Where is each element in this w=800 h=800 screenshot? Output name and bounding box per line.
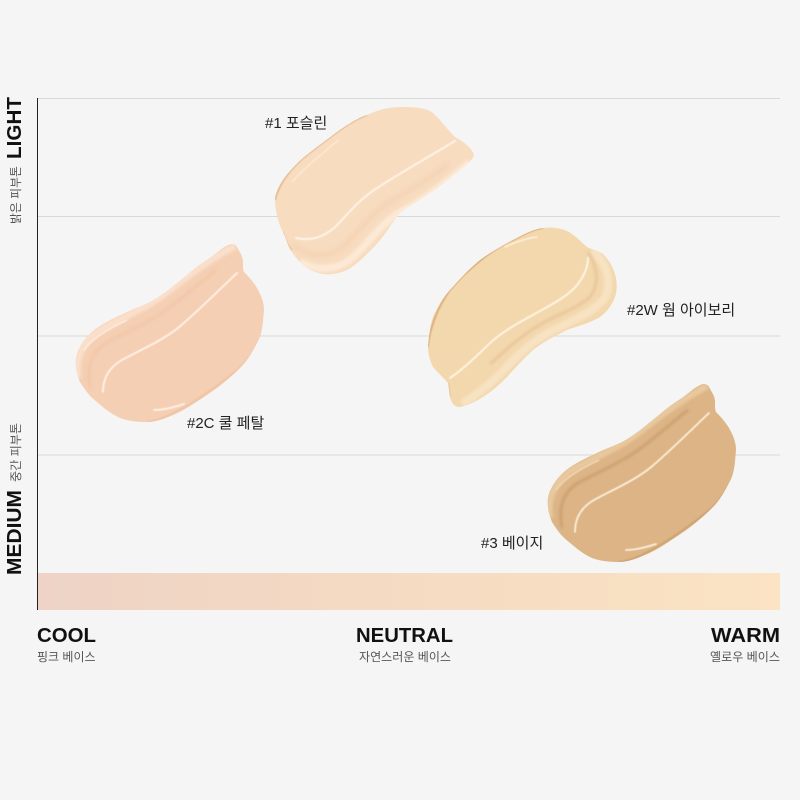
- label: #2W warm ivory: #2W 웜 아이보리: [627, 302, 735, 319]
- highlight: [575, 413, 709, 532]
- label: #2C cool petal: #2C 쿨 페탈: [187, 415, 264, 432]
- swatch: #2W warm ivory: [428, 228, 617, 407]
- vertical axis: [36, 98, 38, 610]
- swatch: #2C cool petal: [76, 244, 264, 422]
- x axis sublabel: natural base: 자연스러운 베이스: [359, 650, 451, 664]
- x axis sublabel: pink base: 핑크 베이스: [37, 650, 96, 664]
- label: #3 beige: #3 베이지: [481, 535, 543, 552]
- highlight: [296, 141, 455, 239]
- grid lines: [37, 98, 780, 455]
- x axis label: COOL: COOL: [37, 625, 96, 647]
- gradient bar: cool to warm: [38, 573, 780, 610]
- swatch: #3 beige: [548, 384, 736, 562]
- y axis sublabel: light skin tone: 밝은 피부톤: [9, 166, 23, 224]
- y axis label: MEDIUM: MEDIUM: [4, 490, 26, 575]
- label: #1 porcelain: #1 포슬린: [265, 115, 327, 132]
- swatch: #1 porcelain: [275, 107, 474, 274]
- highlight: [103, 273, 237, 392]
- y axis sublabel: medium skin tone: 중간 피부톤: [9, 423, 23, 482]
- y axis label: LIGHT: LIGHT: [4, 97, 26, 159]
- highlight: [450, 258, 588, 378]
- x axis sublabel: yellow base: 옐로우 베이스: [710, 650, 780, 664]
- x axis label: WARM: WARM: [711, 625, 780, 647]
- x axis label: NEUTRAL: NEUTRAL: [356, 625, 453, 647]
